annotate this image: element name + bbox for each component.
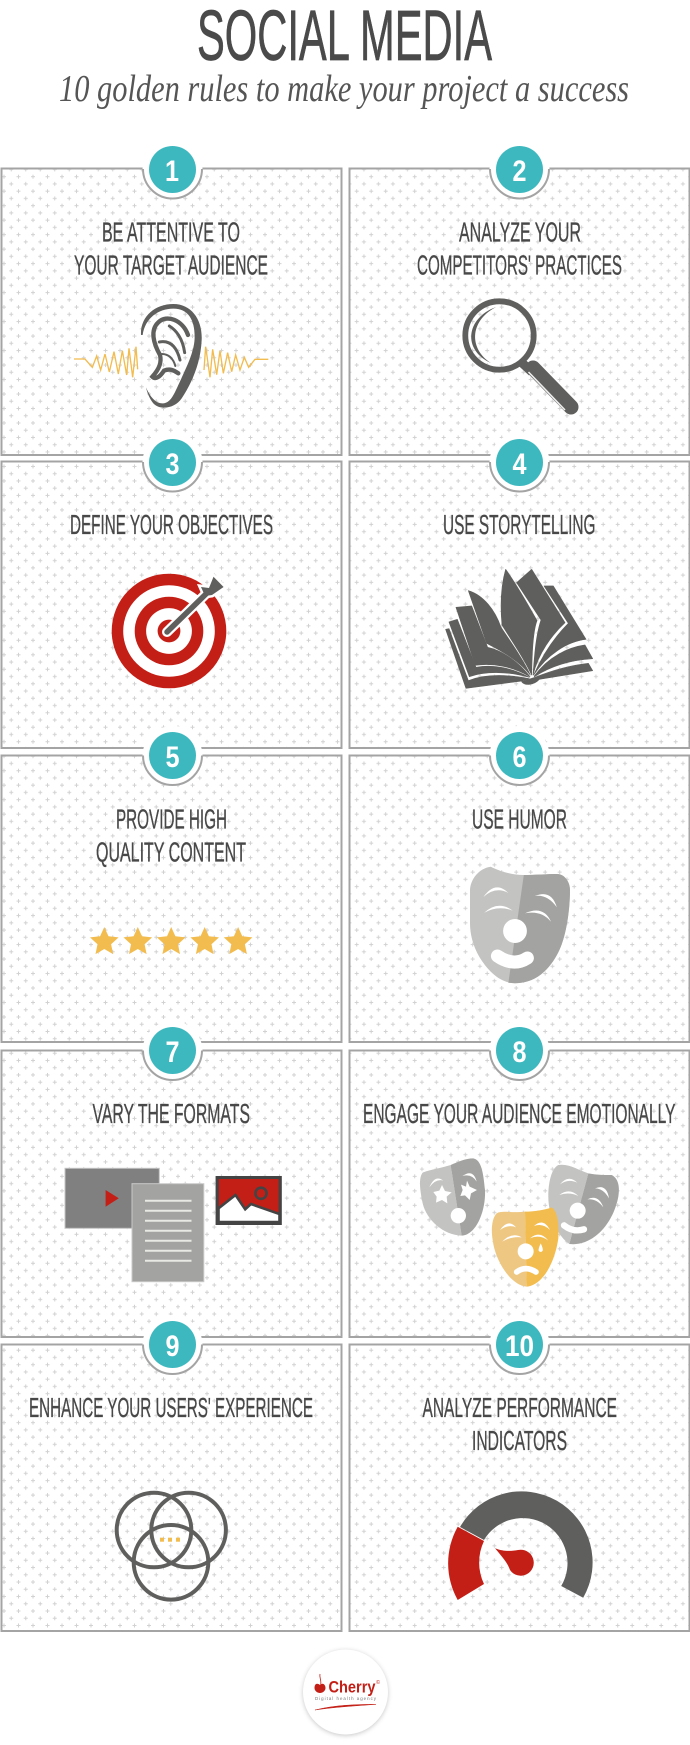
number badge 4	[496, 439, 543, 486]
number badge 9: 9	[166, 1330, 180, 1363]
number badge 2	[496, 146, 543, 193]
number badge 7: 7	[166, 1036, 180, 1069]
number badge 10	[496, 1321, 543, 1368]
heading 10: INDICATORS	[472, 1425, 567, 1456]
heading 9: ENHANCE YOUR USERS' EXPERIENCE	[29, 1392, 313, 1423]
number badge 5	[149, 732, 196, 779]
icon: three theatre masks	[420, 1158, 619, 1287]
heading 5: QUALITY CONTENT	[96, 836, 246, 868]
panel 6: humor	[350, 726, 690, 1042]
icon: smiling theatre mask	[470, 867, 570, 983]
mask: crying gold	[492, 1207, 559, 1287]
panel 2: competitors	[350, 140, 690, 455]
heading 1	[74, 216, 268, 280]
mask: surprised with star eyes	[420, 1158, 485, 1236]
number badge 1: 1	[165, 155, 179, 188]
number badge 1	[149, 146, 196, 193]
icon: open book	[446, 569, 593, 688]
number badge 6	[496, 732, 543, 779]
number badge 3: 3	[166, 448, 180, 481]
icon: target with arrow	[112, 574, 226, 688]
number badge 8	[496, 1027, 543, 1074]
number badge 4: 4	[512, 448, 527, 481]
logo: Cherry digital health agency	[303, 1650, 388, 1734]
heading 5	[96, 804, 246, 868]
icon: five stars	[90, 927, 252, 954]
number badge 5: 5	[166, 741, 180, 774]
number badge 9	[149, 1321, 196, 1368]
icon: ear with sound waves	[74, 304, 268, 408]
heading 5: PROVIDE HIGH	[116, 804, 227, 834]
heading 1: BE ATTENTIVE TO	[102, 216, 240, 248]
heading 10	[422, 1392, 617, 1456]
icon: magnifying glass	[465, 301, 571, 410]
heading 2	[417, 216, 622, 280]
heading 3: DEFINE YOUR OBJECTIVES	[70, 509, 273, 540]
panel 10: performance indicators	[350, 1315, 690, 1631]
icon: speedometer gauge	[448, 1491, 593, 1600]
icon: three overlapping circles	[117, 1493, 226, 1600]
heading 7: VARY THE FORMATS	[92, 1098, 250, 1129]
number badge 8: 8	[512, 1036, 526, 1069]
number badge 3	[149, 439, 196, 486]
logo: Cherry digital health agency: Digital health agency	[315, 1696, 377, 1701]
heading 6: USE HUMOR	[472, 804, 567, 834]
panel 5: quality content	[2, 726, 342, 1042]
panel 3: objectives	[2, 432, 342, 748]
mask: smiling	[548, 1165, 619, 1244]
number badge 2: 2	[512, 155, 526, 188]
heading 1: YOUR TARGET AUDIENCE	[74, 250, 268, 280]
number badge 10: 10	[505, 1330, 534, 1363]
logo: Cherry digital health agency: ©	[376, 1679, 380, 1686]
panel 8: emotions	[350, 1021, 690, 1337]
icon: video, document and image formats	[65, 1168, 280, 1282]
number badge 6: 6	[512, 741, 526, 774]
heading 2: ANALYZE YOUR	[459, 216, 581, 248]
panel 9: user experience	[2, 1315, 342, 1631]
logo: Cherry digital health agency: Cherry	[328, 1678, 376, 1696]
panel 1: target audience	[2, 140, 342, 455]
number badge 7	[149, 1027, 196, 1074]
panel 4: storytelling	[350, 432, 690, 748]
panel 7: formats	[2, 1021, 342, 1337]
